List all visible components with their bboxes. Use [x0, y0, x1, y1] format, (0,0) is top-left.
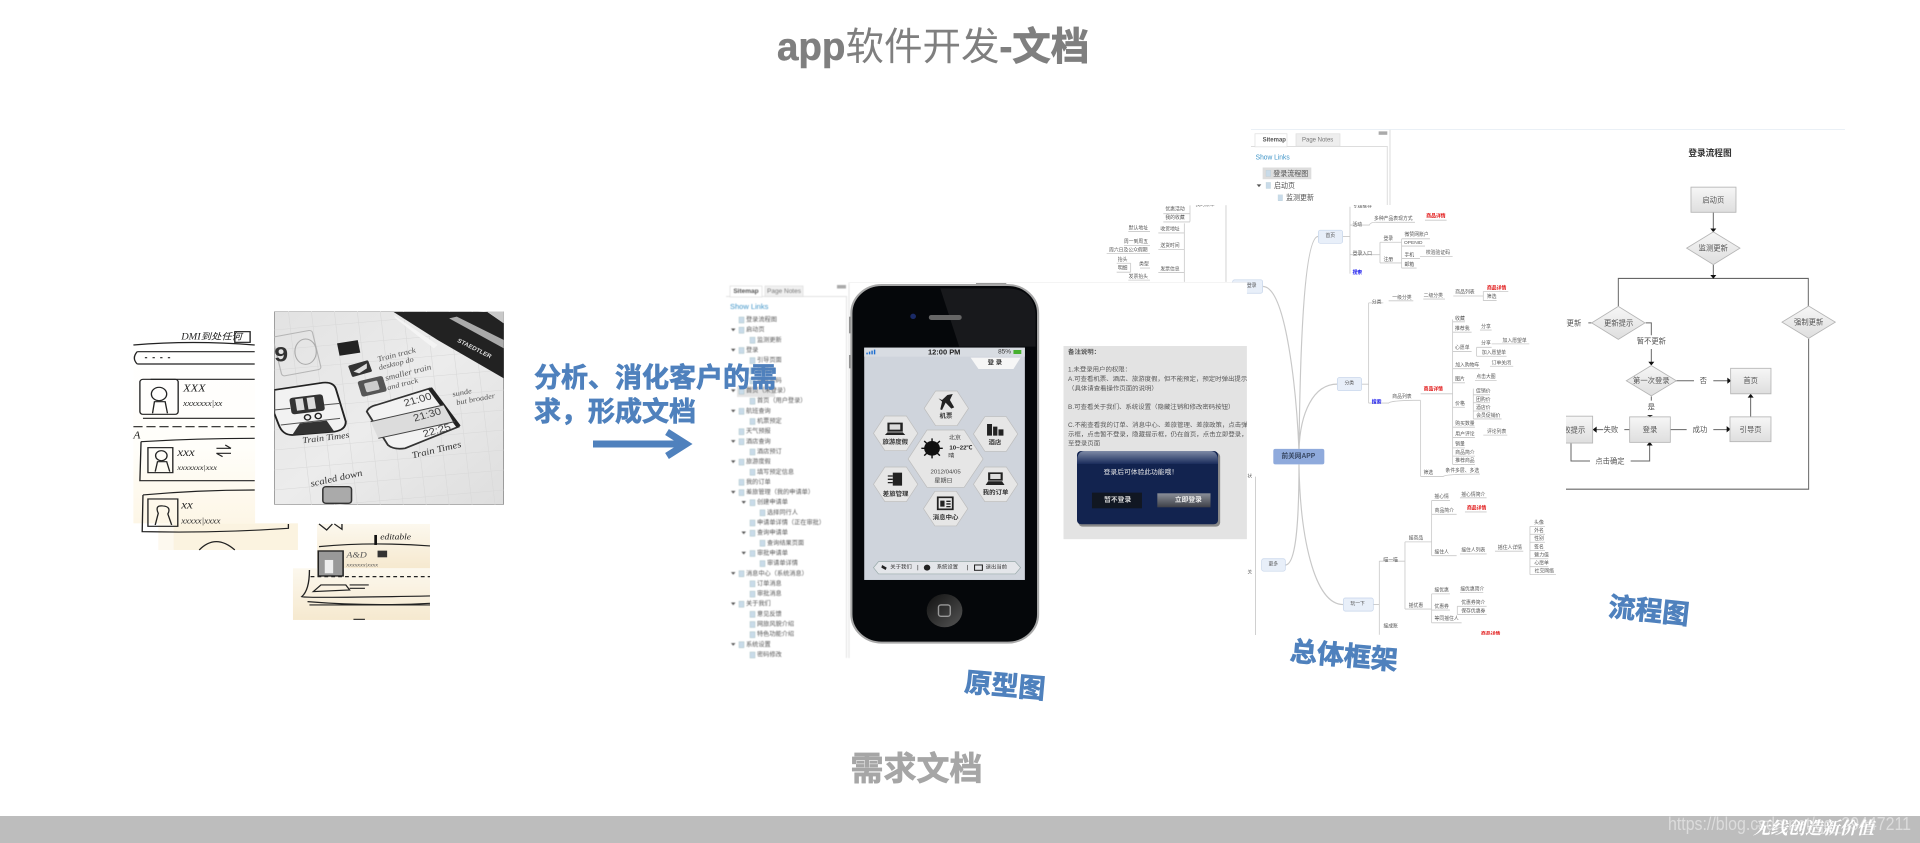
mind map leaf labels: 加入愿望单 [1503, 337, 1527, 344]
mind map leaf labels: 喵一喵 [1383, 558, 1398, 564]
flow labels: 否 [1700, 376, 1708, 385]
mind map leaf labels: 商品详情 [1424, 385, 1443, 393]
mind map leaf labels: 手机 [1404, 251, 1414, 259]
panel: sitemap tree: Sitemap [733, 288, 759, 295]
mind map leaf labels: 促销价 [1476, 388, 1491, 395]
mind map leaf labels: 商品详情 [1487, 285, 1506, 292]
mind map leaf labels: 搜索 [1352, 269, 1362, 276]
sketch: train-times photo: sunde [451, 387, 473, 398]
flow labels: 引导页 [1740, 425, 1762, 434]
panel: background sitemap behind mind map: 监测更新 [1286, 193, 1314, 202]
mind map leaf labels: 商品列表 [1392, 393, 1412, 400]
sitemap rows: 关于我们 [746, 600, 771, 608]
mind map leaf labels: 摇心情 [1434, 493, 1449, 500]
sitemap rows: 引导页面 [757, 356, 782, 364]
mind map leaf labels: 周六日及公众假期 [1109, 246, 1148, 253]
mind map nodes: 玩一下 [1350, 601, 1365, 607]
mind map leaf labels: 周一到周五 [1124, 238, 1148, 245]
mind map leaf labels: 一级分类 [1392, 294, 1412, 301]
sitemap rows: 机票预定 [757, 417, 782, 425]
sketch: contact list page: DMI到处任何 [180, 331, 244, 342]
sitemap rows: 消息中心（系统消息） [746, 569, 808, 577]
title: app软件开发-文档 [777, 26, 1089, 69]
sitemap rows: 我的订单 [746, 478, 771, 486]
mind map leaf labels: 分类 [1372, 298, 1382, 305]
flow labels: 第一次登录 [1633, 375, 1670, 385]
mind map leaf labels: 多种产品表现方式 [1374, 215, 1413, 222]
mind map leaf labels: 二级分类 [1424, 292, 1443, 299]
note box with login dialog: C.不能查看我的订单、消息中心、差旅管理、差旅政策，点击弹出 [1068, 421, 1254, 429]
sitemap rows: 酒店预订 [757, 448, 782, 456]
mind map leaf labels: 校验验证码 [1426, 249, 1450, 256]
panel: sitemap tree: Show Links [730, 302, 769, 311]
hexagon menu: 差旅管理 [883, 490, 909, 498]
mind map leaf labels: 商品简介 [1435, 507, 1454, 514]
sketch: contact list page: xx [180, 498, 193, 511]
mind map leaf labels: 等同摇住人 [1435, 615, 1459, 622]
mind map leaf labels: 我的账单 [1195, 201, 1215, 208]
sketch: contact list page [132, 330, 298, 550]
mind map leaf labels: 购买数量 [1455, 420, 1475, 427]
note box with login dialog: 至登录页面 [1068, 440, 1100, 447]
note box with login dialog: 立即登录 [1175, 495, 1202, 504]
flow labels: 强制更新 [1794, 317, 1824, 327]
sitemap rows: 创建申请单 [757, 498, 788, 506]
mind map leaf labels: 分享 [1481, 323, 1491, 330]
panel: background sitemap behind mind map [1251, 130, 1567, 205]
phone screen: 登 录 [988, 359, 1002, 366]
flow labels: 首页 [1743, 375, 1758, 385]
mind map leaf labels: 加入购物车 [1455, 361, 1479, 368]
mind map nodes: 前关网APP [1281, 451, 1316, 460]
flow labels: 监测更新 [1699, 243, 1728, 253]
note box with login dialog: （具体请查看操作页面的说明） [1068, 385, 1158, 392]
mind map leaf labels: 发票信息 [1160, 265, 1180, 272]
sitemap rows: 首页（用户登录） [757, 397, 806, 405]
label: prototype: 原型图 [963, 668, 1047, 704]
flow labels: 登录 [1643, 424, 1658, 434]
mind map leaf labels: 收藏 [1455, 315, 1465, 322]
panel: background sitemap behind mind map: Show Links [1256, 154, 1290, 161]
mind map leaf labels: 优惠券简介 [1461, 599, 1485, 606]
mind map leaf labels: 筛选 [1423, 469, 1433, 476]
mind map fragments visible right of note [1247, 473, 1255, 635]
sketch: train-times photo: 21:30 [412, 406, 443, 424]
mind map leaf labels: 评论列表 [1487, 428, 1506, 435]
mind map leaf labels: 价格 [1455, 400, 1465, 407]
mind map leaf labels: 登录入口 [1353, 250, 1372, 257]
sitemap rows [731, 316, 825, 658]
sitemap rows: 启动页 [746, 326, 765, 334]
mind map leaf labels: 摇住人 [1434, 548, 1449, 555]
sketch: contact list page: xxxxx|xxxx [180, 516, 221, 525]
panel: prototype note area [849, 283, 1260, 639]
sitemap rows: 订单消息 [757, 579, 782, 587]
panel: background sitemap behind mind map: 启动页 [1274, 181, 1295, 190]
home button [927, 594, 962, 627]
sketch: contact list page: A [132, 430, 141, 441]
caption text: analyse requirements: 求，形成文档 [534, 397, 696, 427]
mind map leaf labels: 商品详情 [1481, 630, 1500, 637]
flow connectors [1566, 212, 1809, 489]
arrow [593, 432, 686, 456]
mind map leaf labels: 心愿单 [1455, 344, 1470, 351]
label: flowchart: 流程图 [1607, 592, 1691, 630]
flow labels: 暂不更新 [1637, 335, 1667, 345]
note box with login dialog [1063, 346, 1260, 539]
sketch: train-times photo: desktop do [377, 355, 415, 372]
panel: sitemap tree: Page Notes [767, 288, 802, 295]
note box with login dialog: B.可查看关于我们、系统设置（隐藏注销和修改密码按钮） [1068, 403, 1234, 411]
hexagon menu: 我的订单 [983, 489, 1008, 496]
mind map leaf labels: 摇成账 [1383, 622, 1398, 629]
mind map leaf labels: 推荐商品 [1455, 457, 1475, 464]
mind map leaf labels: 魅力值 [1534, 551, 1549, 559]
sitemap rows: 验证码 [757, 366, 776, 374]
mind map leaf labels: 登录 [1383, 235, 1393, 242]
sketch: train-times photo: Train track [376, 346, 417, 363]
flow labels [1552, 194, 1824, 466]
flow labels: 启动页 [1702, 194, 1724, 204]
mind map leaf labels: 商品简介 [1455, 449, 1475, 456]
sitemap rows: 差旅管理（我的申请单） [746, 488, 814, 496]
mind map leaf labels: 邮箱 [1404, 261, 1414, 268]
mind map leaf labels: 摇优惠 [1434, 587, 1449, 594]
mind map leaf labels: 团购价 [1476, 396, 1491, 403]
mind map leaf labels: 摇优惠 [1409, 602, 1423, 609]
mind map leaf labels: 搜索 [1372, 399, 1382, 406]
mind map leaf labels [1109, 201, 1554, 637]
sitemap rows: 查询结果页面 [767, 539, 804, 547]
hexagon menu: 旅游度假 [882, 438, 909, 446]
chart: mind map branches [1107, 205, 1556, 635]
mind map leaf labels: 默认地址 [1129, 224, 1148, 231]
mind map leaf labels: 商品列表 [1455, 289, 1475, 296]
mind map leaf labels: 签名 [1534, 543, 1544, 550]
mind map leaf labels: 社交网络 [1535, 568, 1554, 575]
mind map leaf labels: 优惠活动 [1165, 206, 1185, 213]
panel: background sitemap behind mind map: Page Notes [1302, 136, 1333, 144]
flow labels: 立即更新 [1552, 317, 1582, 327]
bottom toolbar: 关于我们 [890, 563, 912, 571]
sketch: train-times photo: smaller train [384, 362, 432, 382]
sitemap rows: 填写预定信息 [757, 468, 794, 476]
mind map leaf labels: 明细 [1118, 265, 1128, 272]
sitemap rows: 系统设置 [746, 640, 771, 648]
hexagon menu [874, 391, 1018, 526]
note box with login dialog: 备注说明： [1068, 348, 1100, 356]
note box with login dialog: 1.未登录用户的权限： [1068, 366, 1131, 373]
mind map leaf labels: 摇商品 [1409, 535, 1423, 542]
flow nodes [1557, 187, 1835, 443]
hexagon menu: 10~22℃ [949, 444, 973, 451]
panel: login flowchart: 登录流程图 [1688, 147, 1732, 158]
panel: sitemap tree [726, 283, 849, 658]
sketch: profile edit page: xxxxxxx|xxxx [345, 563, 379, 568]
mind map leaf labels: 酒店价 [1476, 404, 1491, 411]
flow labels: 失败 [1604, 424, 1619, 434]
flow labels: 失败提示 [1556, 424, 1585, 435]
sitemap rows: 设置密码 [757, 376, 782, 384]
sketch: train-times photo: Train Times [302, 431, 351, 446]
sketch: contact list page: XXX [182, 383, 207, 394]
mind map nodes: 首页 [1325, 232, 1335, 239]
phone screen: 12:00 PM [928, 348, 960, 356]
hexagon menu: 机票 [940, 412, 952, 420]
mind map leaf labels: 加入愿望单 [1482, 349, 1506, 356]
mind map leaf labels: 类型 [1139, 260, 1149, 268]
sitemap rows: 审请单详情 [767, 559, 798, 567]
mind map nodes [1233, 230, 1373, 611]
mind map fragments visible right of note: 关 [1247, 569, 1253, 576]
sketch: train-times photo [273, 310, 504, 510]
note box with login dialog: 示框，点击暂不登录，隐藏提示框，仍在首页，点击立即登录，跳转 [1068, 431, 1260, 438]
mind map leaf labels: 点击大图 [1476, 373, 1496, 380]
sitemap rows: 审批申请单 [757, 549, 788, 557]
mind map nodes: 分类 [1344, 380, 1354, 387]
sketch: profile edit page: A&D [345, 550, 367, 559]
sitemap rows: 旅游度假 [746, 458, 771, 466]
hexagon menu: 晴 [948, 451, 955, 459]
phone screen [864, 348, 1025, 580]
hexagon menu: 2012/04/05 [930, 470, 962, 476]
sitemap rows: 网旅风貌介绍 [757, 620, 794, 628]
section heading: requirements document: 需求文档 [850, 750, 982, 787]
mind map leaf labels: 外名 [1534, 527, 1544, 534]
sketch: contact list page: xxxxxxx|xxx [176, 463, 218, 472]
sketch: contact list page: xxxxxxx|xx [182, 399, 223, 408]
panel: background sitemap behind mind map: 登录流程图 [1273, 169, 1308, 178]
sketch: train-times photo: Train Times [411, 440, 463, 461]
hexagon menu: 北京 [949, 433, 961, 441]
mind map leaf labels: 商品详情 [1467, 505, 1486, 512]
mind map leaf labels: 摇住人详情 [1498, 544, 1522, 551]
label: overall framework: 总体框架 [1289, 636, 1399, 676]
hexagon menu: 消息中心 [933, 514, 959, 521]
phone screen: 85% [998, 349, 1011, 355]
mind map leaf labels: 性别 [1534, 535, 1544, 542]
mind map leaf labels: 头像 [1534, 519, 1544, 526]
sketch: train-times photo: scaled down [309, 468, 364, 489]
flow labels: 成功 [1693, 424, 1707, 434]
sitemap rows: 登录流程图 [746, 316, 777, 324]
mind map leaf labels: 摇心情简介 [1461, 491, 1485, 498]
footer bar [0, 814, 1920, 843]
sketch: contact list page: xxx [176, 446, 195, 459]
flow labels: 更新提示 [1604, 317, 1633, 327]
sitemap rows: 登录 [746, 346, 758, 354]
note box with login dialog: A.可查看机票、酒店、旅游度假，但不能预定，预定时弹出提示 [1068, 375, 1247, 383]
mind map leaf labels: 保存优惠券 [1461, 607, 1485, 614]
sketch: profile edit page: editable [380, 532, 411, 541]
sitemap rows: 航班查询 [746, 407, 771, 415]
hexagon menu: 酒店 [988, 439, 1001, 446]
mind map leaf labels: 筛选 [1487, 293, 1497, 300]
sitemap rows: 申请单详情（正在审批） [757, 518, 825, 526]
mind map leaf labels: 优惠券 [1434, 603, 1449, 610]
panel: hand-drawn sketches [132, 310, 504, 620]
mind map leaf labels: 会员促销价 [1476, 412, 1500, 419]
mind map leaf labels: 商品详情 [1426, 213, 1446, 220]
bottom toolbar [874, 562, 1021, 574]
mind map leaf labels: 摇优惠简介 [1460, 585, 1484, 592]
mind map leaf labels: 摇住人列表 [1461, 547, 1485, 554]
mind map leaf labels: 订单关闭 [1492, 359, 1511, 366]
panel: background sitemap behind mind map: Sitemap [1263, 136, 1286, 144]
mind map leaf labels: OPENID [1404, 240, 1423, 246]
bottom toolbar: 退出当前 [986, 563, 1007, 571]
sketch: train-times photo: 22:25 [421, 422, 453, 440]
mind map leaf labels: 抬头 [1118, 256, 1128, 263]
note box with login dialog: 暂不登录 [1104, 495, 1132, 504]
mind map leaf labels: 推荐我 [1455, 325, 1470, 332]
panel: login flowchart [1566, 129, 1845, 490]
mind map leaf labels: 微赞网账户 [1405, 231, 1429, 238]
note box with login dialog: 登录后可体验此功能哦！ [1104, 467, 1178, 476]
bottom toolbar: 系统设置 [937, 563, 958, 571]
sitemap rows: 选择同行人 [767, 508, 798, 516]
sitemap rows: 审批消息 [757, 590, 782, 598]
flow labels: 是 [1648, 402, 1656, 411]
sketch: train-times photo: but broader [455, 391, 497, 407]
mind map leaf labels: 用户评论 [1455, 430, 1475, 437]
footer slogan: 无线创造新价值 [1753, 819, 1877, 838]
sketch: train-times photo: and track [386, 376, 420, 392]
mind map leaf labels: 发票抬头 [1129, 273, 1148, 280]
sitemap rows: 天气预报 [746, 427, 771, 435]
sitemap rows: 酒店查询 [746, 437, 771, 445]
mind map leaf labels: 注册 [1383, 256, 1393, 263]
sitemap rows: 意见反馈 [757, 610, 782, 618]
sitemap rows: 密码修改 [757, 650, 782, 658]
sketch: train-times photo: STAEDTLER [456, 338, 493, 360]
panel: overall framework mind map [1100, 201, 1566, 637]
sitemap rows: 首页（未登录） [746, 387, 789, 395]
flow labels: 点击确定 [1595, 455, 1625, 466]
phone mockup [849, 283, 1038, 643]
mind map fragments visible right of note: 状 [1247, 473, 1253, 478]
hexagon menu: 星期日 [934, 477, 953, 484]
mind map leaf labels: 收货地址 [1160, 226, 1180, 233]
mind map leaf labels: 活动 [1352, 221, 1362, 228]
sketch: profile edit page [293, 524, 430, 620]
sketch: train-times photo: 21:00 [402, 391, 433, 409]
mind map leaf labels: 分享 [1481, 339, 1491, 346]
mind map leaf labels: 我的收藏 [1165, 214, 1185, 221]
sitemap rows: 特色功能介绍 [757, 630, 794, 638]
mind map nodes: 更多 [1268, 560, 1278, 568]
phone body [849, 283, 1038, 643]
mind map leaf labels: 图片 [1455, 375, 1465, 383]
mind map leaf labels: 专题推荐 [1353, 202, 1372, 209]
caption text: analyse requirements: 分析、消化客户的需 [534, 363, 777, 393]
mind map leaf labels: 送货时间 [1160, 242, 1180, 249]
sitemap rows: 查询申请单 [757, 529, 788, 537]
sitemap rows: 监测更新 [757, 336, 782, 344]
mind map leaf labels: 心愿单 [1534, 559, 1549, 566]
mind map leaf labels: 条件多层、多选 [1445, 467, 1479, 474]
mind map nodes: 登录 [1247, 282, 1257, 289]
mind map leaf labels: 销量 [1455, 441, 1465, 448]
sketch: train-times photo: 9 [274, 342, 288, 366]
